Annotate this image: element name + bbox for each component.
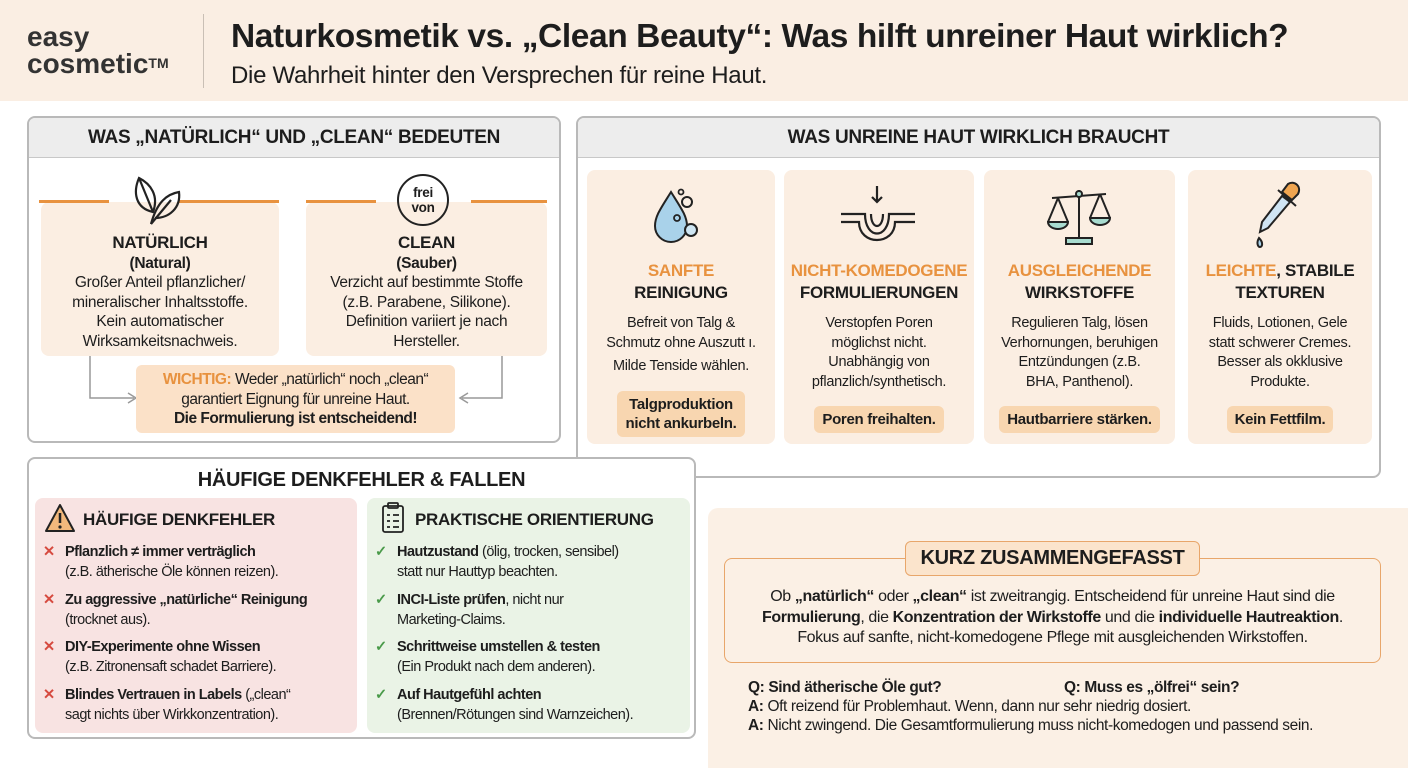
list: denkfehler: ✕ [43, 544, 55, 560]
card: clean: Definition variiert je nach [346, 313, 507, 330]
card: clean: Hersteller. [393, 332, 460, 350]
list: orientierung: statt nur Hauttyp beachten. [397, 564, 558, 580]
card: reinigung [587, 170, 775, 444]
icon: clipboard [382, 502, 404, 533]
card: komedogen: pflanzlich/synthetisch. [812, 374, 946, 390]
list: denkfehler: ✕ [43, 592, 55, 608]
list: orientierung: Hautzustand (ölig, trocken, sensibel) [397, 544, 619, 560]
icon: warning [45, 504, 75, 532]
card: texturen: Besser als okklusive [1217, 354, 1343, 370]
heading badge: KURZ ZUSAMMENGEFASST [920, 547, 1184, 569]
list: orientierung: INCI-Liste prüfen, nicht nur [397, 592, 563, 608]
faq: Q: Muss es „ölfrei“ sein? [1064, 679, 1239, 696]
panel: meaning [27, 116, 561, 443]
heading badge [905, 541, 1200, 576]
card: komedogen: Unabhängig von [828, 354, 930, 370]
list: denkfehler: (z.B. Zitronensaft schadet Barriere). [65, 659, 276, 675]
list: denkfehler: DIY-Experimente ohne Wissen [65, 639, 260, 655]
list: denkfehler: (trocknet aus). [65, 612, 150, 628]
header band [0, 0, 1408, 101]
card: natuerlich: mineralischer Inhaltsstoffe. [72, 294, 248, 310]
card: wirkstoffe: Entzündungen (z.B. [1019, 354, 1140, 370]
faq: A: Nicht zwingend. Die Gesamtformulierung muss nicht-komedogen und passend sein. [748, 717, 1313, 734]
summary box [724, 558, 1381, 663]
panel: summary [708, 508, 1408, 768]
faq: Q: Sind ätherische Öle gut? [748, 679, 941, 696]
card: reinigung: Befreit von Talg & [627, 315, 735, 331]
card: clean: Verzicht auf bestimmte Stoffe [330, 274, 523, 291]
list: orientierung: (Ein Produkt nach dem anderen). [397, 659, 595, 675]
list: denkfehler: Blindes Vertrauen in Labels („clean“ [65, 686, 290, 702]
callout: wichtig: garantiert Eignung für unreine Haut. [181, 390, 410, 408]
panel: denkfehler [27, 457, 696, 739]
card: komedogen: Poren freihalten. [822, 411, 936, 428]
icon: dropper [1256, 182, 1300, 248]
list: denkfehler: sagt nichts über Wirkkonzentration). [65, 706, 278, 722]
list: orientierung [367, 498, 690, 733]
card: texturen: Fluids, Lotionen, Gele [1213, 315, 1347, 331]
heading: HÄUFIGE DENKFEHLER & FALLEN [198, 469, 525, 491]
card: clean: CLEAN [398, 233, 455, 252]
icon: scale [1047, 190, 1111, 245]
card: clean: (z.B. Parabene, Silikone). [343, 294, 510, 310]
card: wirkstoffe: Regulieren Talg, lösen [1011, 315, 1148, 331]
callout: wichtig: WICHTIG: Weder „natürlich“ noch „clean“ [163, 371, 428, 388]
card: texturen: TEXTUREN [1235, 283, 1325, 302]
icon: leaf [134, 176, 180, 225]
panel: needs [576, 116, 1381, 478]
card: texturen: Kein Fettfilm. [1235, 411, 1325, 428]
list: orientierung: Marketing-Claims. [397, 612, 505, 628]
faq: A: Oft reizend für Problemhaut. Wenn, dann nur sehr niedrig dosiert. [748, 698, 1191, 715]
card: natuerlich [41, 202, 279, 356]
list: orientierung: ✓ [375, 639, 387, 655]
card: reinigung: Talgproduktion [629, 396, 733, 412]
summary box: Formulierung, die Konzentration der Wirkstoffe und die individuelle Hautreaktion. [762, 608, 1343, 626]
card: reinigung: REINIGUNG [634, 283, 728, 302]
card: wirkstoffe: Hautbarriere stärken. [1007, 411, 1152, 428]
card: reinigung: SANFTE [648, 261, 714, 280]
panel: needs: WAS UNREINE HAUT WIRKLICH BRAUCHT [788, 127, 1169, 148]
card: natuerlich: Wirksamkeitsnachweis. [83, 332, 237, 350]
icon: drop [654, 188, 698, 243]
card: natuerlich: NATÜRLICH [112, 233, 208, 252]
icon: pore [841, 186, 915, 242]
logo: cosmeticTM [27, 48, 169, 79]
card: wirkstoffe: WIRKSTOFFE [1025, 283, 1134, 302]
card: reinigung: Schmutz ohne Auszutt ı. [606, 334, 756, 350]
card: texturen: statt schwerer Cremes. [1209, 334, 1351, 350]
card: wirkstoffe: BHA, Panthenol). [1026, 374, 1133, 390]
card: komedogen: Verstopfen Poren [825, 315, 933, 331]
title: Naturkosmetik vs. „Clean Beauty“: Was hilft unreiner Haut wirklich? [231, 18, 1288, 55]
card: natuerlich: Großer Anteil pflanzlicher/ [75, 274, 245, 291]
list: denkfehler: HÄUFIGE DENKFEHLER [83, 510, 275, 529]
list: denkfehler: ✕ [43, 686, 55, 702]
card: komedogen [784, 170, 974, 444]
list: denkfehler: Zu aggressive „natürliche“ Reinigung [65, 592, 307, 608]
card: natuerlich: Kein automatischer [96, 313, 224, 330]
card: komedogen: NICHT-KOMEDOGENE [791, 261, 967, 280]
list: orientierung: ✓ [375, 686, 387, 702]
icon: frei von: frei [413, 185, 433, 200]
card: texturen: LEICHTE, STABILE [1206, 261, 1354, 280]
card: wirkstoffe [984, 170, 1175, 444]
card: reinigung: Milde Tenside wählen. [613, 358, 749, 374]
arrows [89, 356, 503, 404]
card: texturen: Produkte. [1250, 374, 1310, 390]
callout: wichtig: Die Formulierung ist entscheidend! [174, 410, 417, 427]
list: orientierung: Schrittweise umstellen & testen [397, 639, 600, 655]
card: natuerlich: (Natural) [129, 255, 191, 272]
list: orientierung: (Brennen/Rötungen sind Warnzeichen). [397, 706, 633, 722]
list: orientierung: ✓ [375, 592, 387, 608]
card: reinigung: nicht ankurbeln. [625, 414, 737, 432]
list: denkfehler [35, 498, 357, 733]
card: texturen [1188, 170, 1372, 444]
card: wirkstoffe: Verhornungen, beruhigen [1001, 334, 1158, 350]
callout: wichtig [136, 365, 455, 433]
faq [748, 678, 1313, 734]
logo: easy [27, 21, 89, 52]
subtitle: Die Wahrheit hinter den Versprechen für reine Haut. [231, 62, 767, 89]
card: clean: (Sauber) [396, 255, 457, 272]
card: wirkstoffe: AUSGLEICHENDE [1008, 261, 1151, 280]
list: denkfehler: (z.B. ätherische Öle können reizen). [65, 564, 278, 580]
list: denkfehler: Pflanzlich ≠ immer verträglich [65, 544, 255, 560]
card: komedogen: möglichst nicht. [831, 334, 927, 350]
list: orientierung: Auf Hautgefühl achten [397, 686, 541, 702]
list: orientierung: ✓ [375, 544, 387, 560]
summary box: Ob „natürlich“ oder „clean“ ist zweitrangig. Entscheidend für unreine Haut sind die [770, 588, 1335, 605]
summary box: Fokus auf sanfte, nicht-komedogene Pflege mit ausgleichenden Wirkstoffen. [797, 629, 1308, 646]
icon: frei von [397, 174, 449, 226]
list: denkfehler: ✕ [43, 639, 55, 655]
card: clean [306, 202, 547, 356]
list: orientierung: PRAKTISCHE ORIENTIERUNG [415, 510, 654, 529]
card: komedogen: FORMULIERUNGEN [800, 283, 958, 302]
panel: meaning: WAS „NATÜRLICH“ UND „CLEAN“ BEDEUTEN [88, 127, 500, 148]
logo [27, 21, 169, 79]
icon: frei von: von [411, 200, 435, 215]
